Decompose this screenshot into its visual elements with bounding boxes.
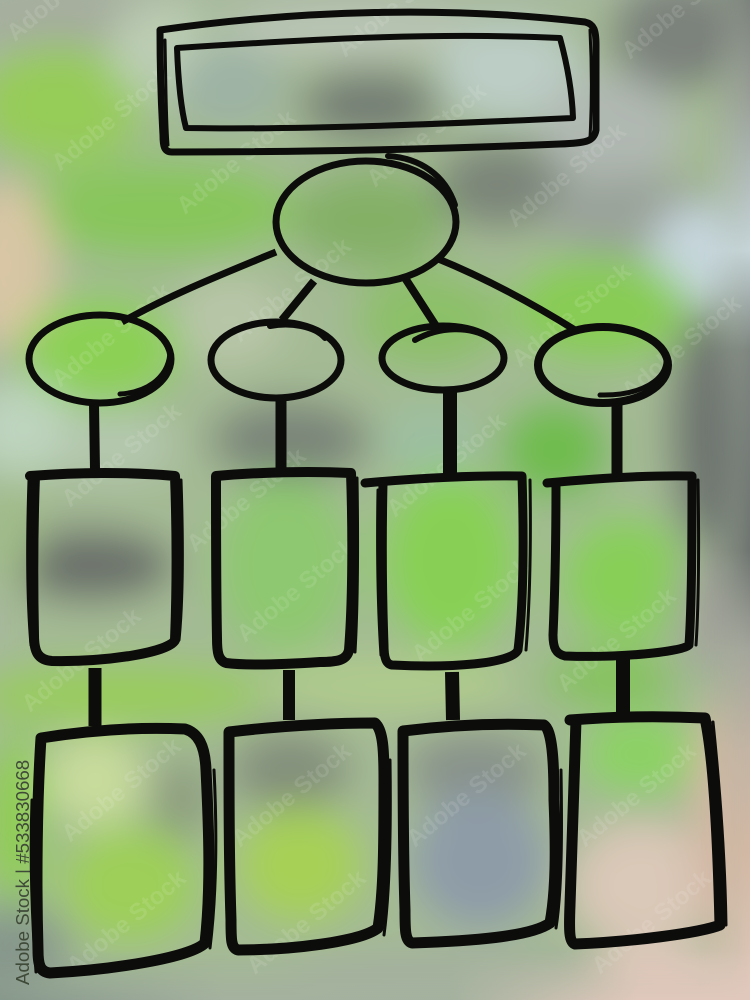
third-level boxes [28, 472, 699, 666]
box 7 [403, 724, 561, 943]
watermark text: Adobe Stock [402, 737, 532, 853]
oval 4 [538, 327, 668, 403]
watermark text: Adobe Stock [47, 61, 177, 177]
watermark text: Adobe Stock [502, 117, 632, 233]
watermark text: Adobe Stock [587, 864, 717, 980]
watermark text: Adobe Stock [47, 277, 177, 393]
watermark text: Adobe Stock [232, 532, 362, 648]
watermark text: Adobe Stock [17, 602, 147, 718]
watermark text: Adobe Stock [507, 257, 637, 373]
watermark text: Adobe Stock [552, 582, 682, 698]
oval 2 [211, 322, 341, 398]
watermark text: Adobe Stock [172, 104, 302, 220]
watermark text: Adobe Stock [227, 232, 357, 348]
watermark text: Adobe Stock [182, 442, 312, 558]
watermark text: Adobe Stock [572, 737, 702, 853]
watermark text: Adobe Stock [242, 864, 372, 980]
oval 1 [29, 315, 171, 403]
watermark text: Adobe Stock [382, 407, 512, 523]
box 4 [547, 476, 699, 656]
watermark text: Adobe Stock [362, 77, 492, 193]
bottom boxes [31, 717, 726, 973]
watermark text: Adobe Stock [57, 732, 187, 848]
stock id vertical text: Adobe Stock | #533830668 [12, 760, 33, 985]
box 6 [229, 723, 390, 950]
connectors [94, 252, 623, 726]
box 5 [31, 728, 216, 973]
box 8 [570, 717, 726, 944]
watermark text: Adobe Stock [617, 289, 747, 405]
box 1 [28, 473, 182, 661]
top oval [276, 156, 456, 283]
oval 3 [382, 326, 504, 390]
box 3 [365, 476, 530, 666]
box 2 [216, 472, 358, 665]
watermark text: Adobe Stock [407, 552, 537, 668]
watermark text: Adobe Stock [62, 864, 192, 980]
watermark text: Adobe Stock [227, 737, 357, 853]
second-level ovals [29, 315, 668, 403]
watermark text: Adobe Stock [57, 397, 187, 513]
title frame [160, 12, 596, 152]
